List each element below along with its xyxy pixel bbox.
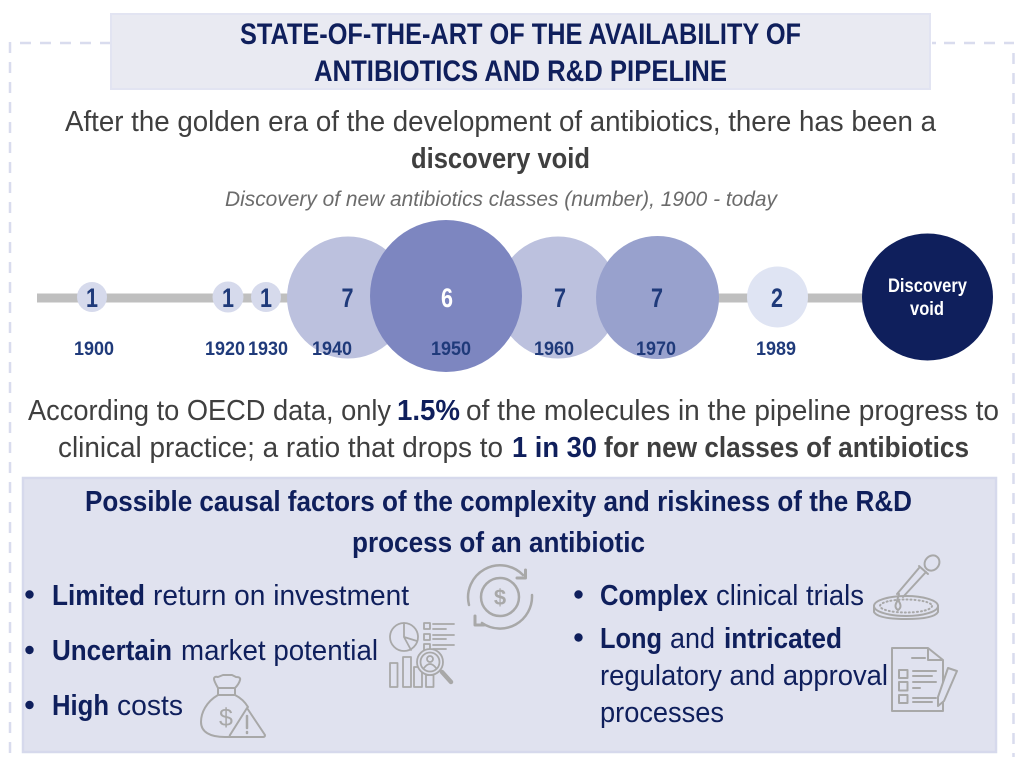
OECD statement: 1.5%	[397, 395, 460, 427]
icon: return on investment coin	[468, 565, 532, 629]
left factor list: return on investment	[153, 580, 409, 612]
bubble: 1940: 7	[342, 283, 354, 313]
OECD statement	[28, 395, 999, 464]
left factor list	[25, 580, 409, 722]
year labels: 1970	[636, 339, 676, 360]
right factor list: Long	[600, 623, 662, 655]
icon: money bag with warning: $	[219, 704, 233, 732]
year labels: 1989	[756, 339, 796, 360]
OECD statement: of the molecules in the pipeline progress to	[466, 395, 999, 427]
left factor list: High	[52, 690, 109, 722]
bubble: 1930	[251, 282, 281, 313]
icon: money bag with warning	[201, 675, 265, 737]
icon: checklist and pencil	[892, 648, 957, 711]
bubble: 1920: 1	[222, 283, 234, 313]
year labels: 1930	[248, 339, 288, 360]
bubble: discovery void: Discovery	[888, 275, 967, 297]
chart subtitle: Discovery of new antibiotics classes (number), 1900 - today	[225, 188, 778, 211]
OECD statement: for new classes of antibiotics	[604, 432, 969, 464]
year labels: 1920	[205, 339, 245, 360]
OECD statement: According to OECD data, only	[28, 395, 391, 427]
year labels: 1950	[431, 339, 471, 360]
title: STATE-OF-THE-ART OF THE AVAILABILITY OF	[240, 18, 801, 51]
left factor list: Uncertain	[52, 635, 172, 667]
intro text: discovery void	[411, 143, 590, 175]
right factor list: processes	[600, 697, 724, 729]
right factor list: Complex	[600, 580, 708, 612]
bubble: 1970: 7	[651, 283, 663, 313]
right factor list: intricated	[724, 623, 842, 655]
OECD statement: clinical practice; a ratio that drops to	[58, 432, 503, 464]
timeline bubble chart	[37, 220, 993, 372]
bubble: 1989: 2	[771, 283, 783, 313]
left factor list: market potential	[181, 635, 378, 667]
bubble: 1940	[287, 236, 409, 358]
bubble: 1970	[596, 236, 719, 359]
panel heading: Possible causal factors of the complexity and riskiness of the R&D	[85, 486, 912, 518]
title: ANTIBIOTICS AND R&D PIPELINE	[314, 55, 727, 88]
title	[111, 14, 930, 89]
left factor list: Limited	[52, 580, 145, 612]
bubble: 1989	[747, 266, 808, 328]
icon: market analysis	[390, 623, 454, 687]
panel heading	[85, 486, 912, 559]
panel heading: process of an antibiotic	[352, 527, 645, 559]
bubble: 1900: 1	[86, 283, 98, 313]
bubble: 1950	[370, 220, 522, 372]
right factor list: regulatory and approval	[600, 660, 888, 692]
panel: causal factors	[23, 478, 996, 752]
right factor list: and	[670, 623, 715, 655]
left factor list: costs	[117, 690, 183, 722]
bubble: 1930: 1	[260, 283, 272, 313]
year labels: 1960	[534, 339, 574, 360]
bubble: 1920	[212, 282, 244, 313]
intro text	[65, 106, 937, 175]
bubble: 1950: 6	[441, 283, 453, 313]
bubble: 1960: 7	[554, 283, 566, 313]
bubble: discovery void: void	[910, 298, 944, 320]
bubble: 1900	[77, 282, 107, 313]
year labels: 1900	[74, 339, 114, 360]
year labels	[74, 339, 796, 360]
bubble: 1960	[497, 236, 619, 358]
bubble: discovery void	[862, 234, 993, 360]
right factor list	[574, 580, 888, 729]
OECD statement: 1 in 30	[512, 432, 597, 464]
icon: return on investment coin: $	[494, 585, 506, 610]
icon: dropper and petri dish	[874, 552, 943, 619]
year labels: 1940	[312, 339, 352, 360]
intro text: After the golden era of the development of antibiotics, there has been a	[65, 106, 937, 138]
right factor list: clinical trials	[716, 580, 864, 612]
